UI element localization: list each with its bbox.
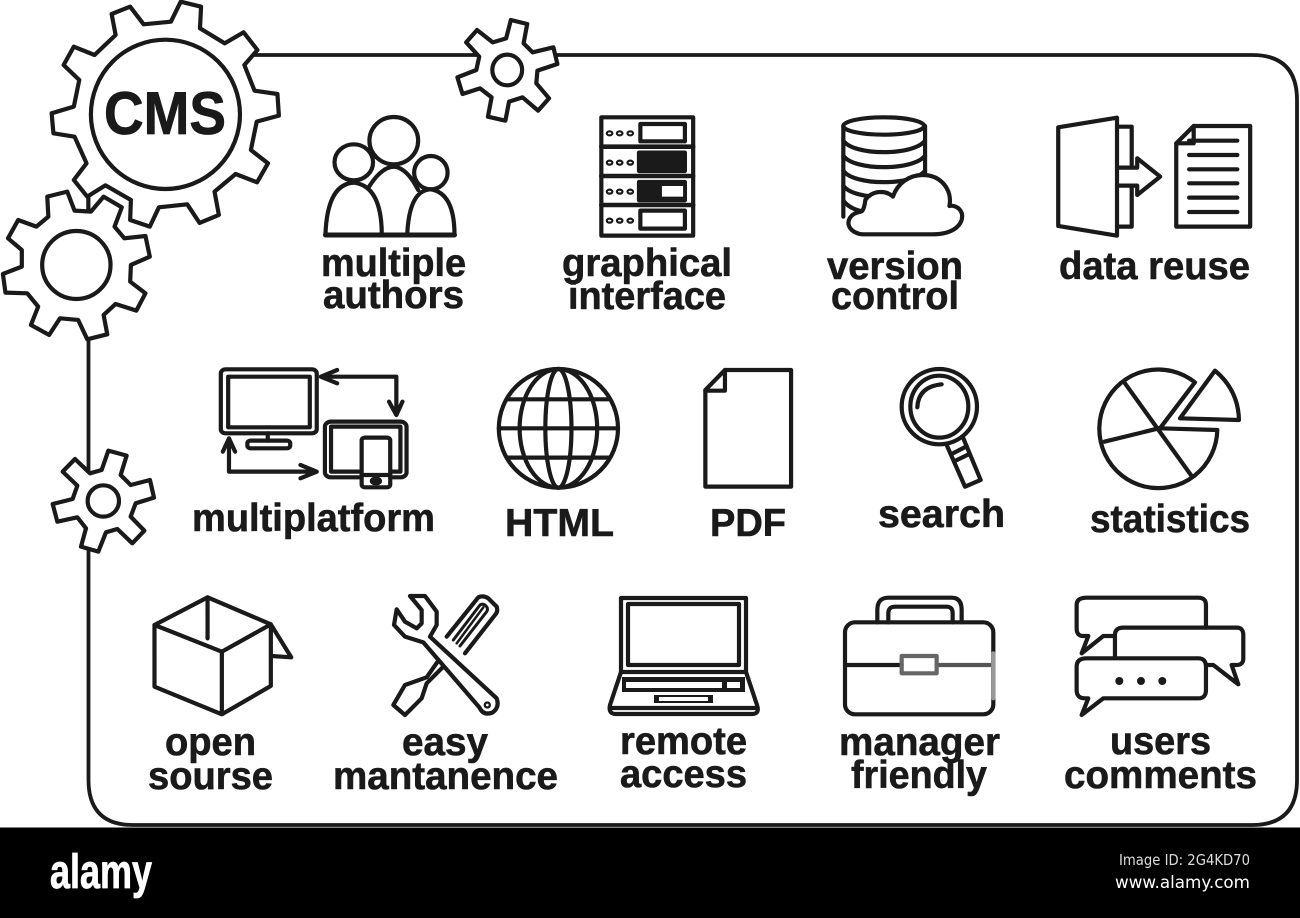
label: manager friendly: manager — [839, 721, 1000, 764]
label: easy mantanence: easy — [402, 721, 488, 764]
logo: alamy: alamy — [50, 846, 152, 899]
icon: server rack — [601, 117, 693, 236]
item: data reuse — [1058, 118, 1250, 288]
label: remote access — [620, 720, 747, 796]
item: search — [878, 369, 1005, 536]
title: CMS: CMS — [104, 80, 226, 147]
icon: pie chart — [1099, 369, 1239, 488]
label: open sourse — [148, 721, 273, 798]
icon: door, arrow and document — [1058, 118, 1250, 236]
item: easy maintenance — [333, 596, 558, 798]
image id: Image ID: 2G4KD70 — [1119, 851, 1250, 869]
label: version control — [827, 245, 963, 318]
item: users comments — [1064, 598, 1257, 797]
icon: open box — [154, 597, 291, 714]
item: statistics — [1090, 369, 1250, 541]
label: HTML: HTML — [505, 502, 614, 545]
icon: globe — [499, 369, 618, 488]
item: manager friendly — [839, 598, 1000, 797]
frame: rounded border — [88, 55, 1297, 825]
label: graphical interface: graphical — [562, 242, 732, 285]
label: multiple authors — [321, 242, 466, 317]
item: HTML — [499, 369, 618, 545]
item: multiplatform — [192, 369, 435, 540]
label: remote access: access — [620, 753, 747, 796]
gear: small left gear — [53, 451, 154, 552]
label: data reuse: data reuse — [1059, 245, 1250, 288]
label: easy mantanence — [333, 721, 558, 798]
label: remote access: remote — [620, 720, 747, 763]
label: users comments — [1064, 720, 1257, 797]
footer: black stock-photo bar — [0, 828, 1300, 918]
gear: small top gear — [457, 20, 557, 121]
item: open source — [148, 597, 291, 798]
icon: magnifying glass — [902, 369, 981, 487]
item: remote access — [610, 598, 758, 796]
gear: CMS main gear — [52, 2, 279, 227]
icon: people — [325, 117, 455, 235]
label: search: search — [878, 493, 1005, 536]
label: graphical interface: interface — [568, 275, 726, 318]
label: multiple authors: multiple — [321, 242, 466, 285]
label: easy mantanence: mantanence — [333, 755, 558, 798]
label: graphical interface — [562, 242, 732, 318]
label: multiple authors: authors — [323, 274, 464, 317]
icon: monitor, tablet, phone and arrows — [221, 369, 407, 487]
label: PDF: PDF — [710, 502, 786, 545]
icon: page — [705, 370, 791, 487]
item: graphical interface — [562, 117, 732, 318]
label: manager friendly: friendly — [851, 754, 987, 797]
label: version control: version — [827, 245, 963, 288]
label: open sourse: open — [165, 721, 256, 764]
icon: database and cloud — [843, 117, 962, 234]
icon: wrench and screwdriver — [393, 596, 498, 715]
item: multiple authors — [321, 117, 466, 317]
label: statistics: statistics — [1090, 498, 1250, 541]
icon: briefcase — [845, 598, 993, 714]
item: PDF — [705, 370, 791, 545]
icon: laptop — [610, 598, 758, 714]
label: version control: control — [831, 275, 959, 318]
label: users comments: users — [1110, 720, 1211, 763]
label: multiplatform: multiplatform — [192, 497, 435, 540]
label: manager friendly — [839, 721, 1000, 797]
item: version control — [827, 117, 963, 318]
label: users comments: comments — [1064, 754, 1257, 797]
icon: speech bubbles — [1077, 598, 1243, 715]
gear: second large gear — [3, 192, 150, 339]
label: open sourse: sourse — [148, 755, 273, 798]
website: www.alamy.com — [1115, 873, 1250, 893]
